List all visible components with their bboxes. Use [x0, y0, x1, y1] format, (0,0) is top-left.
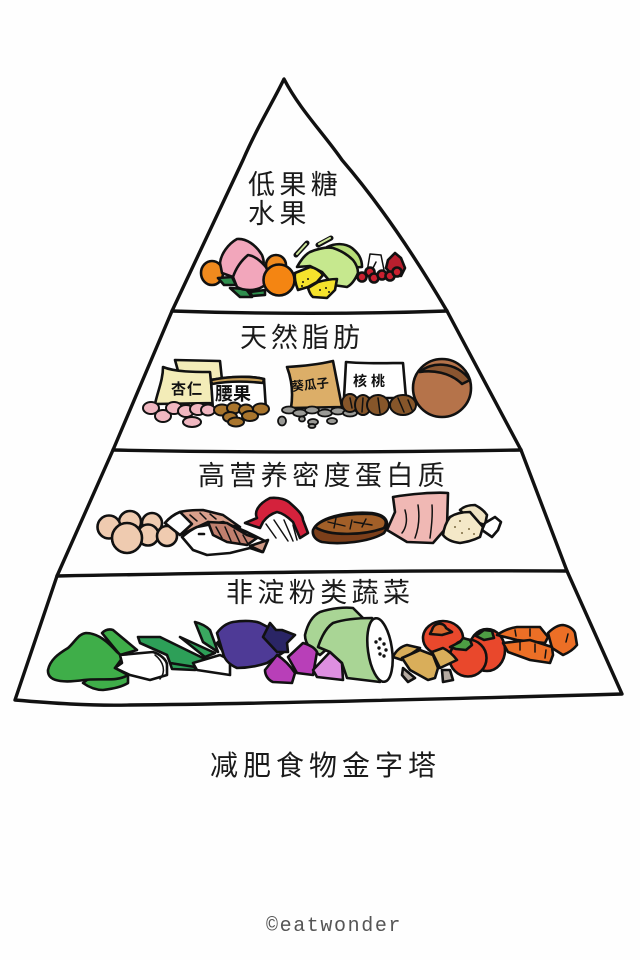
chart title: 减肥食物金字塔: [210, 750, 441, 781]
nuts group: [143, 359, 471, 428]
icon: pork: [387, 493, 448, 543]
icon: eggplant: [217, 621, 295, 668]
icon: large peach: [220, 239, 264, 277]
icon: cashews: [214, 402, 269, 426]
protein group: [98, 493, 501, 555]
icon: sunflower seed bag: 葵瓜子: [291, 375, 330, 394]
icon: left orange: [201, 261, 223, 285]
icon: almond bags: 杏仁: [171, 380, 203, 398]
heading: low sugar fruit: [248, 170, 342, 229]
icon: steak: [313, 513, 387, 543]
icon: coconut: [413, 359, 471, 417]
pyramid outline: [15, 79, 622, 705]
icon: walnuts: [342, 394, 416, 415]
icon: lemon seeds: [301, 278, 330, 293]
icon: almond bags: [155, 360, 222, 404]
icon: sunflower seed bag: [287, 361, 342, 408]
heading: low sugar fruit: 水果: [248, 199, 311, 229]
icon: eggs: [98, 511, 177, 553]
icon: lemon back: [295, 267, 323, 290]
icon: shrimp: [245, 498, 308, 541]
icon: walnut bag: 核桃: [353, 373, 389, 389]
icon: cabbage: [318, 617, 396, 683]
credit: ©eatwonder: [266, 915, 402, 938]
icon: walnut bag: [344, 362, 406, 398]
icon: onions: [265, 643, 343, 683]
icon: scallion leaves: [138, 622, 230, 675]
icon: melon: [297, 248, 358, 287]
icon: small peach: [233, 255, 268, 290]
icon: cashew bag: 腰果: [215, 384, 251, 404]
icon: chicken leg: [443, 505, 501, 543]
icon: back orange: [266, 255, 286, 275]
heading: nutrient dense protein: 高营养密度蛋白质: [198, 461, 449, 491]
icon: back cabbage: [305, 608, 363, 655]
icon: melon stems: [296, 238, 331, 255]
icon: back melon: [327, 244, 362, 268]
heading: non-starchy vegetables: 非淀粉类蔬菜: [226, 578, 414, 608]
icon: fish: [165, 510, 268, 555]
icon: tomatoes: [423, 621, 505, 676]
icon: cherries and berries: [358, 253, 405, 282]
icon: lemon front: [308, 279, 337, 298]
icon: leaves: [218, 277, 265, 297]
icon: bok choy: [48, 629, 167, 690]
icon: mushrooms: [393, 645, 457, 682]
vegetables group: [48, 608, 577, 690]
icon: almonds: [143, 402, 215, 427]
icon: carrots: [497, 625, 577, 663]
icon: front orange: [264, 264, 294, 296]
icon: cashew bag: [211, 377, 266, 410]
heading: low sugar fruit: 低果糖: [248, 170, 342, 200]
icon: seeds: [278, 406, 357, 428]
heading: natural fats: 天然脂肪: [240, 323, 364, 353]
fruit group: [201, 238, 405, 298]
